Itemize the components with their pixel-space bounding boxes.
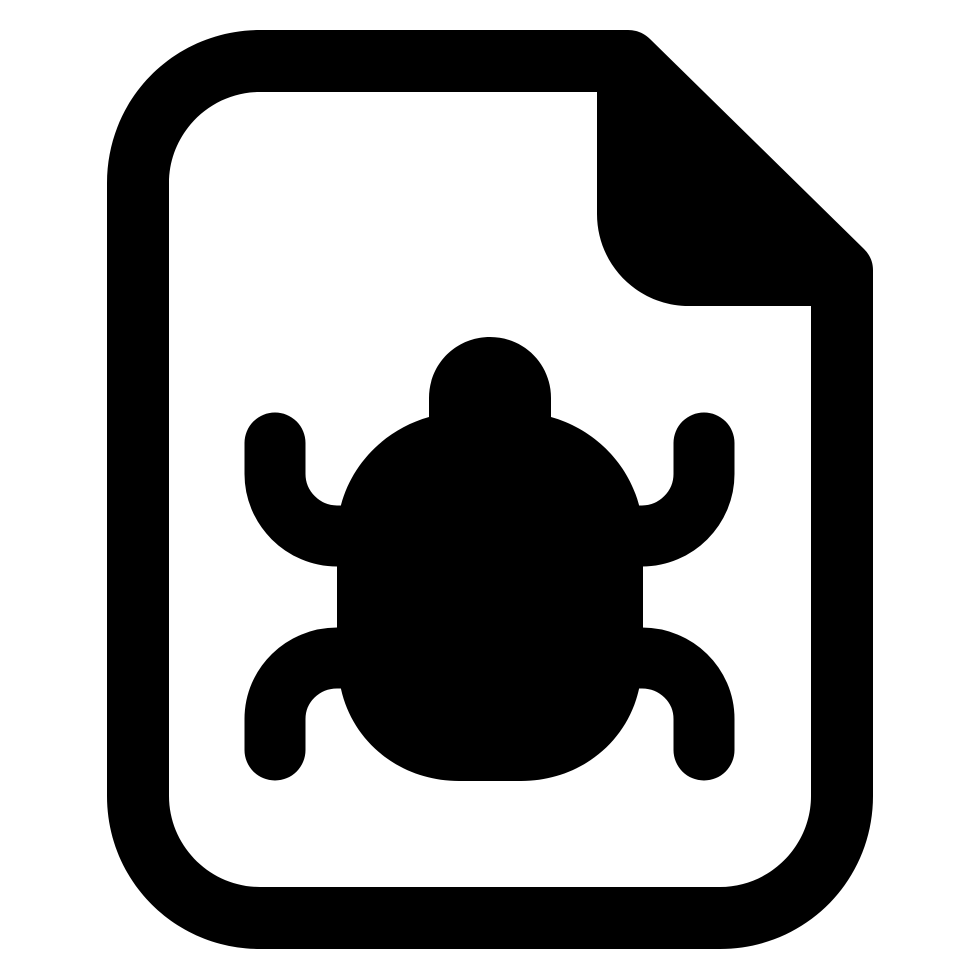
bug upper left leg [275, 443, 345, 536]
bug body [337, 337, 643, 781]
bug upper right leg [635, 443, 704, 536]
icon: bug [275, 337, 704, 781]
bug lower right leg [635, 658, 704, 750]
icon: document outline [107, 30, 873, 949]
bug lower left leg [275, 658, 345, 750]
